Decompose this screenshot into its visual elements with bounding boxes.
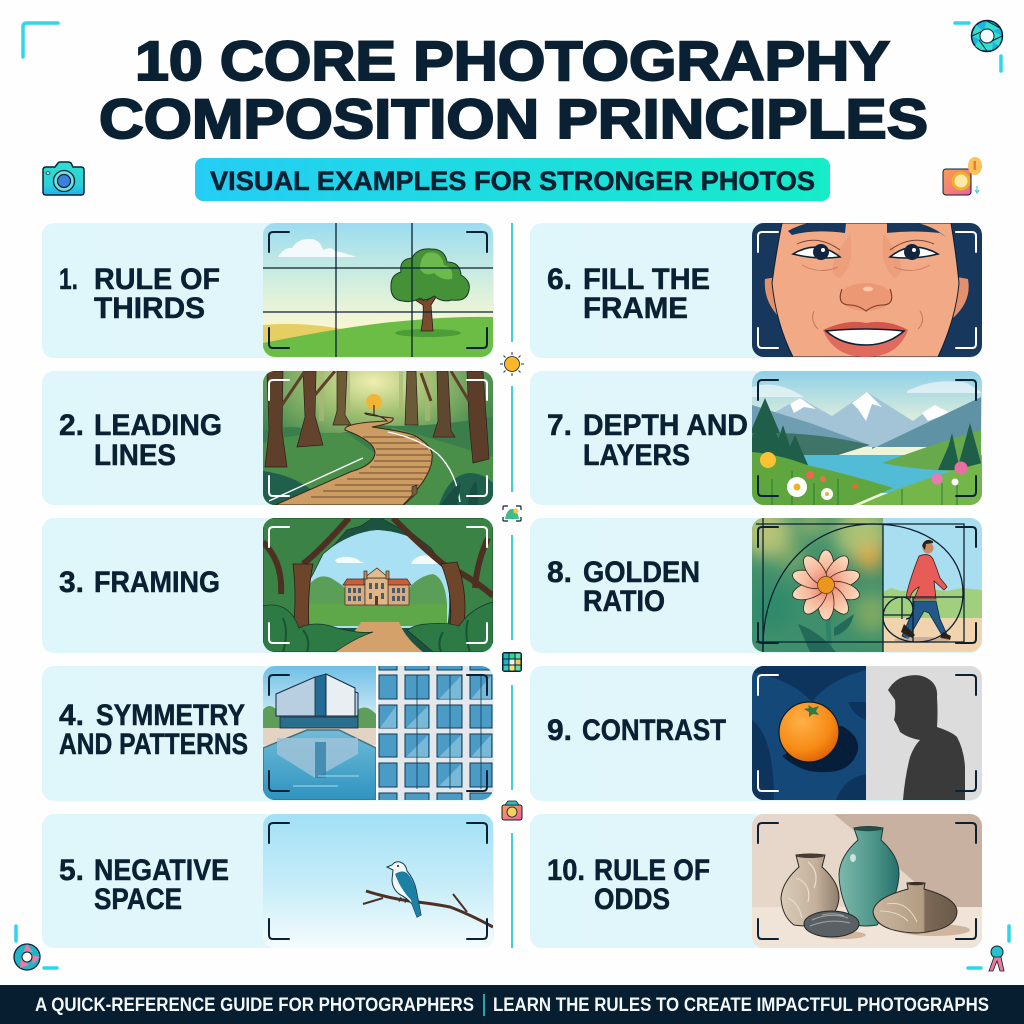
card 5: negative space [42, 814, 494, 948]
title [99, 29, 928, 150]
label 5: NEGATIVE [94, 854, 229, 887]
label 5: 5. [59, 854, 84, 887]
title: COMPOSITION PRINCIPLES [99, 87, 928, 150]
label 8: 8. [547, 556, 572, 589]
center divider [500, 223, 524, 948]
label 6: FILL THE [583, 263, 710, 296]
label 10: 10. [547, 854, 585, 887]
title: 10 CORE PHOTOGRAPHY [135, 29, 890, 92]
label 7: LAYERS [583, 439, 690, 472]
corner bracket: top left [23, 23, 58, 57]
image: mountains and lake [744, 371, 983, 505]
label 6: FRAME [583, 292, 688, 325]
label 1: 1. [59, 263, 78, 296]
image: forest boardwalk [263, 371, 493, 505]
label 8: RATIO [583, 585, 665, 618]
icon: aperture top right [955, 20, 1002, 71]
label 9: 9. [547, 714, 572, 747]
image: tree on thirds grid [263, 223, 493, 357]
card 3: framing [42, 518, 494, 653]
card 1: rule of thirds [42, 223, 494, 358]
label 6 [547, 263, 710, 325]
label 3: 3. [59, 566, 84, 599]
icon: camera left [43, 162, 84, 195]
image: three vases and stone [752, 814, 982, 948]
label 8 [547, 556, 700, 618]
footer bar [0, 985, 1024, 1024]
icon: sun [500, 352, 524, 376]
footer bar: A QUICK-REFERENCE GUIDE FOR PHOTOGRAPHERS [35, 995, 474, 1016]
label 6: 6. [547, 263, 572, 296]
icon: grid [502, 652, 522, 672]
label 5: SPACE [94, 883, 182, 916]
label 7: 7. [547, 409, 572, 442]
image: flower and walker with golden spiral [752, 518, 982, 652]
card 7: depth and layers [530, 371, 983, 505]
label 5 [59, 854, 229, 916]
card 10: rule of odds [530, 814, 982, 948]
label 1: RULE OF [94, 263, 220, 296]
label 1: THIRDS [94, 292, 205, 325]
icon: small camera [502, 801, 522, 820]
label 10: RULE OF [594, 854, 710, 887]
label 7 [547, 409, 748, 472]
label 9: CONTRAST [582, 714, 726, 747]
subtitle pill: VISUAL EXAMPLES FOR STRONGER PHOTOS [210, 166, 815, 196]
card 6: fill the frame [530, 221, 982, 358]
subtitle pill [195, 158, 830, 201]
label 2: LINES [94, 439, 176, 472]
icon: gradient camera right [943, 157, 982, 195]
label 2 [59, 409, 222, 472]
image: bird on branch [263, 814, 493, 948]
label 2: 2. [59, 409, 84, 442]
label 8: GOLDEN [583, 556, 700, 589]
card 8: golden ratio [530, 505, 982, 653]
card 4: symmetry and patterns [42, 666, 494, 801]
image: manor framed by trees [263, 518, 493, 652]
label 10: ODDS [594, 883, 670, 916]
label 7: DEPTH AND [583, 409, 748, 442]
label 4: AND PATTERNS [59, 728, 248, 761]
card 9: contrast [530, 666, 982, 801]
label 10 [547, 854, 710, 916]
corner accents and icons: bottom right [968, 926, 1009, 971]
corner accents and icons: bottom left [14, 926, 57, 970]
label 4 [59, 699, 248, 761]
image: orange on navy and silhouette [752, 666, 982, 800]
image: close-up face [752, 221, 982, 357]
label 4: SYMMETRY [96, 699, 245, 732]
label 3: FRAMING [94, 566, 220, 599]
label 4: 4. [59, 699, 84, 732]
label 2: LEADING [94, 409, 222, 442]
label 1 [59, 263, 220, 325]
card 2: leading lines [42, 371, 494, 505]
image: building reflection and window pattern [263, 666, 493, 800]
icon: photo frame [503, 506, 521, 521]
